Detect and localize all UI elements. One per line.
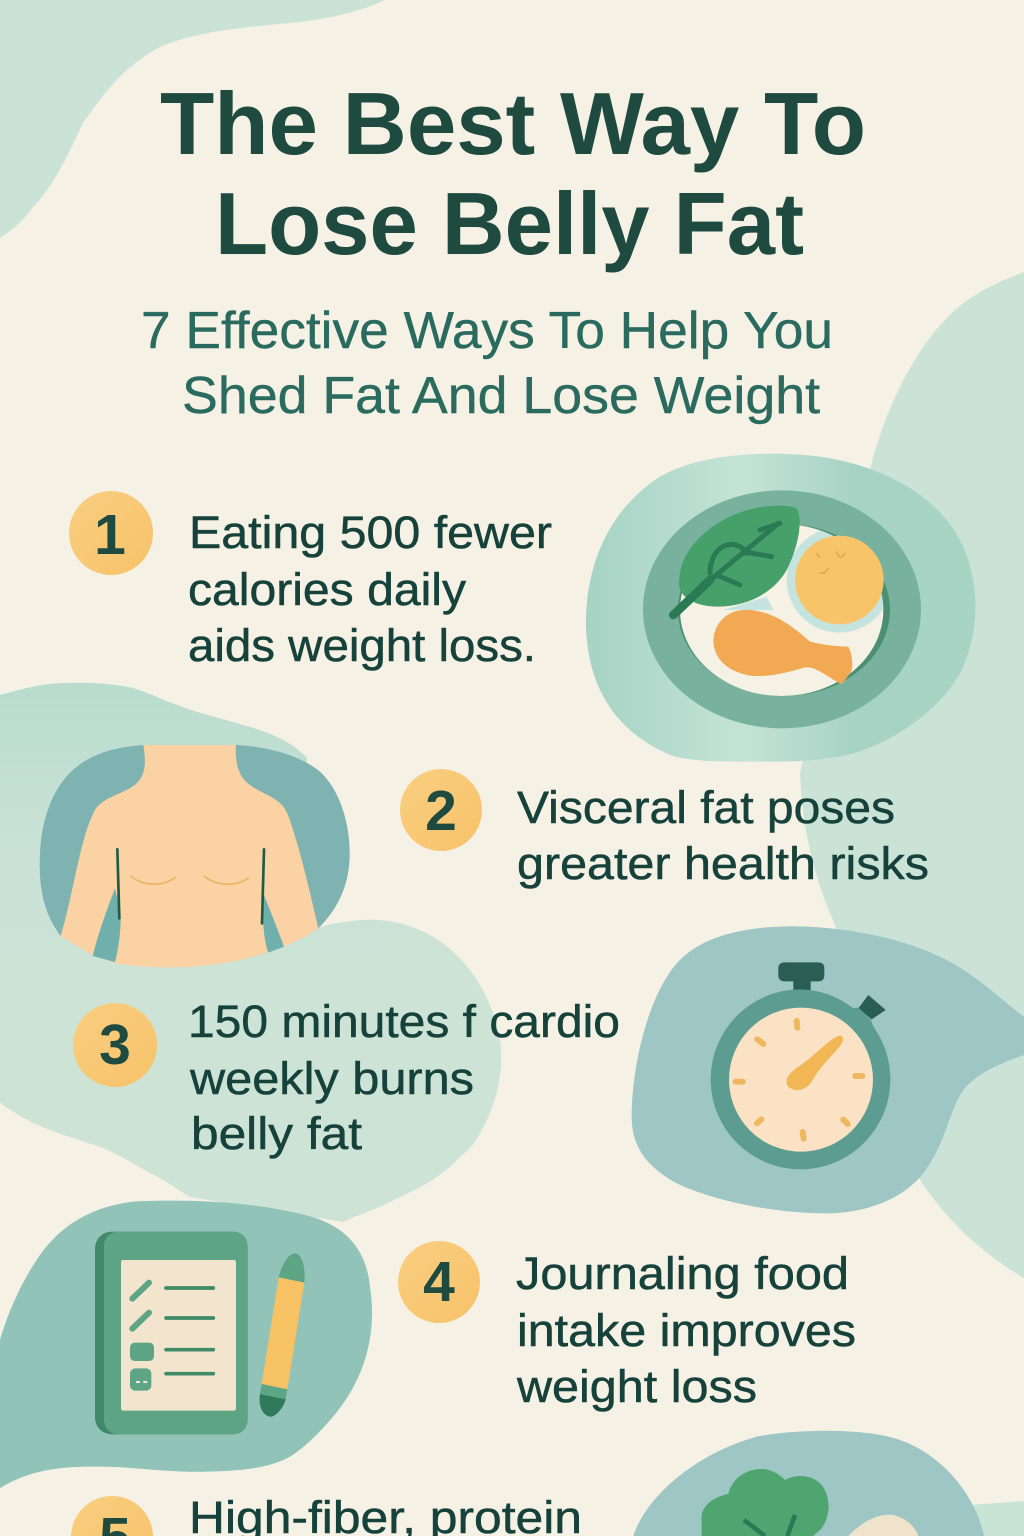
icon: torso (40, 745, 350, 967)
egg (848, 1515, 918, 1536)
icon: plate of food (586, 454, 975, 762)
text 2: Visceral fat poses (517, 782, 895, 833)
case (711, 989, 890, 1169)
torso backdrop blob (40, 745, 350, 936)
plate surface (680, 524, 883, 696)
text 4: weight loss (516, 1361, 757, 1412)
plate rim (643, 490, 921, 728)
text 1: Eating 500 fewer (189, 507, 552, 558)
text 4: Journaling food (516, 1248, 849, 1299)
icon: food journal and pen (0, 1201, 372, 1488)
badge 3 (73, 1003, 157, 1087)
item 4: 4 (423, 1250, 455, 1314)
food: chicken drumstick (713, 610, 852, 684)
title: The Best Way To (160, 74, 866, 173)
text 3 (188, 996, 620, 1159)
text 4: intake improves (517, 1305, 856, 1356)
icon: greens and egg (633, 1431, 984, 1536)
title (160, 74, 866, 273)
item 5 (71, 1492, 582, 1536)
item 2: 2 (425, 779, 457, 843)
skin (61, 745, 318, 967)
tick marks (736, 1021, 862, 1139)
checklist marks (130, 1283, 154, 1391)
title: Lose Belly Fat (215, 174, 804, 273)
pen (260, 1253, 305, 1417)
dial (729, 1008, 873, 1152)
item 1: 1 (94, 503, 126, 567)
item 3 (73, 996, 620, 1159)
text 2 (517, 782, 929, 889)
badge 2 (400, 769, 482, 851)
item 1 (69, 491, 552, 671)
background blob: right side (800, 272, 1024, 1278)
background blob: top left (0, 0, 385, 238)
text 3: weekly burns (189, 1053, 474, 1104)
subtitle: 7 Effective Ways To Help You (141, 302, 833, 360)
item 3: 3 (99, 1013, 131, 1077)
hand (786, 1036, 843, 1090)
item 2 (400, 769, 929, 889)
text 4 (516, 1248, 856, 1412)
journal backdrop blob (0, 1201, 372, 1488)
crown and button (778, 962, 886, 1019)
icon: stopwatch (632, 926, 1024, 1213)
arm gaps (93, 888, 284, 962)
text 2: greater health risks (517, 838, 929, 889)
background blob: bottom right (970, 1501, 1024, 1536)
checklist lines (166, 1288, 213, 1374)
text 3: belly fat (191, 1108, 363, 1159)
plate backdrop blob (586, 454, 975, 762)
journal cover (95, 1232, 248, 1434)
badge 5 (71, 1496, 153, 1536)
food: spinach leaf (673, 506, 800, 615)
journal page (121, 1260, 236, 1411)
text 1: aids weight loss. (188, 620, 536, 671)
badge 1 (69, 491, 153, 575)
text 1 (188, 507, 552, 671)
greens backdrop blob (633, 1431, 984, 1536)
subtitle: Shed Fat And Lose Weight (182, 367, 821, 425)
chest curves (131, 876, 248, 884)
background blob: left side (0, 683, 501, 1222)
badge 4 (398, 1241, 480, 1323)
text 1: calories daily (188, 564, 467, 615)
stopwatch backdrop blob (632, 926, 1024, 1213)
side contour lines (117, 849, 264, 923)
text 3: 150 minutes f cardio (188, 996, 620, 1047)
item 4 (398, 1241, 856, 1412)
food: orange ball (795, 536, 884, 624)
leafy green (702, 1469, 829, 1536)
subtitle (141, 302, 833, 425)
